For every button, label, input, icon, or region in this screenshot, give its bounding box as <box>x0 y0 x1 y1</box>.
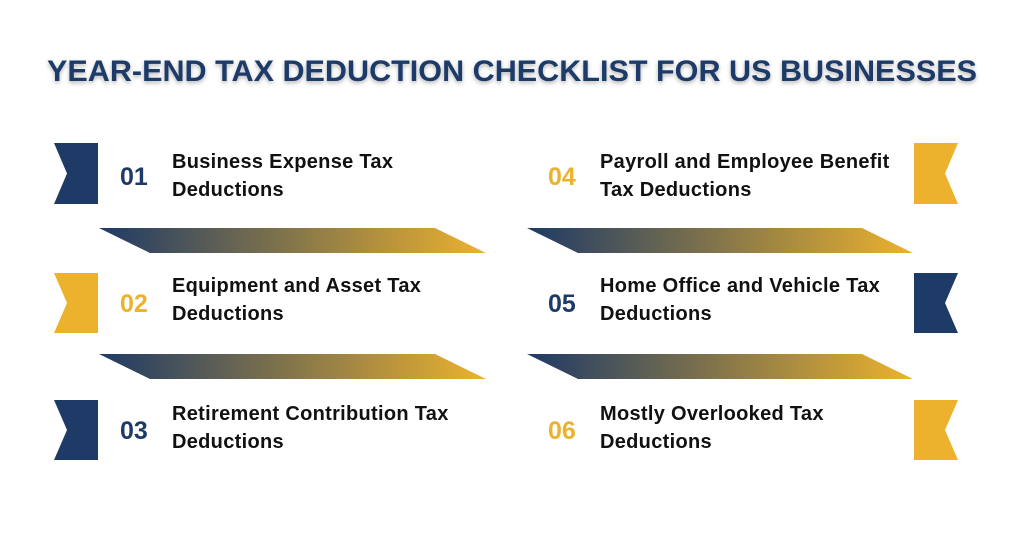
text 04: Payroll and Employee Benefit <box>600 151 890 173</box>
item 06 <box>548 400 958 460</box>
icon: flag 02 <box>54 273 98 333</box>
title: YEAR-END TAX DEDUCTION CHECKLIST FOR US BUSINESSES <box>47 55 977 88</box>
item 01 <box>54 143 393 204</box>
icon: flag 01 <box>54 143 98 204</box>
text 05: Deductions <box>600 303 712 325</box>
icon: flag 05 <box>914 273 958 333</box>
text 06: Deductions <box>600 431 712 453</box>
number 03: 03 <box>120 417 148 445</box>
text 03: Deductions <box>172 431 284 453</box>
text 03: Retirement Contribution Tax <box>172 403 449 425</box>
text 04: Tax Deductions <box>600 179 752 201</box>
item 03 <box>54 400 449 460</box>
band 2 left <box>99 354 486 379</box>
icon: flag 03 <box>54 400 98 460</box>
text 01: Deductions <box>172 179 284 201</box>
item 05 <box>548 273 958 333</box>
text 06: Mostly Overlooked Tax <box>600 403 824 425</box>
item 02 <box>54 273 421 333</box>
number 05: 05 <box>548 290 576 318</box>
number 02: 02 <box>120 290 148 318</box>
band 2 right <box>527 354 913 379</box>
text 02: Deductions <box>172 303 284 325</box>
band 1 left <box>99 228 486 253</box>
number 01: 01 <box>120 163 148 191</box>
band 1 right <box>527 228 913 253</box>
text 02: Equipment and Asset Tax <box>172 275 421 297</box>
text 01: Business Expense Tax <box>172 151 393 173</box>
icon: flag 04 <box>914 143 958 204</box>
number 06: 06 <box>548 417 576 445</box>
number 04: 04 <box>548 163 576 191</box>
item 04 <box>548 143 958 204</box>
icon: flag 06 <box>914 400 958 460</box>
text 05: Home Office and Vehicle Tax <box>600 275 880 297</box>
